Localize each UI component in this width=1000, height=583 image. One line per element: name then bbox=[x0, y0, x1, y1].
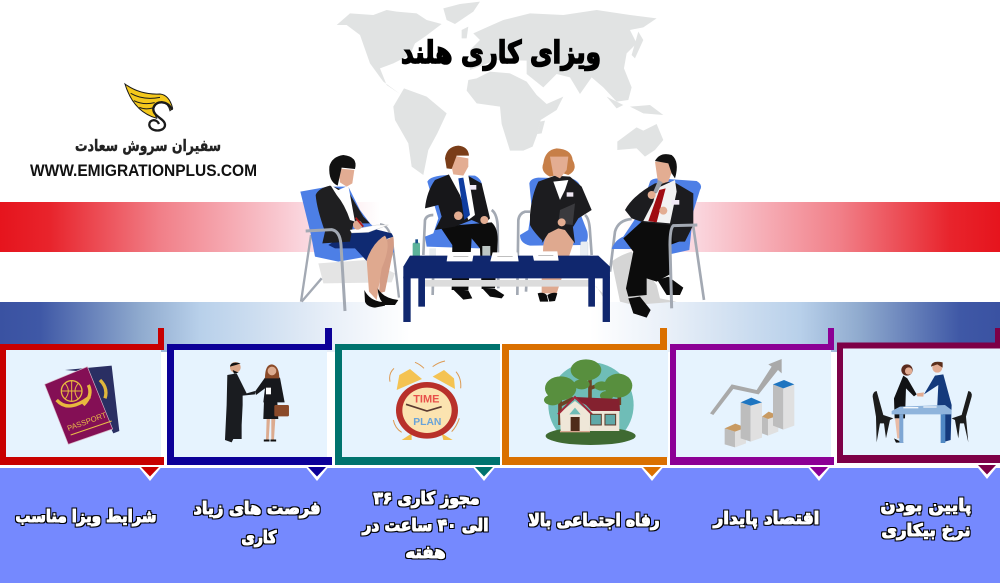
caption: رفاه اجتماعی بالا bbox=[528, 511, 660, 531]
icon: business handshake bbox=[225, 362, 289, 442]
panel discussion illustration bbox=[300, 146, 704, 322]
panel 5: stable economy bbox=[670, 328, 834, 529]
caption: الی ۴۰ ساعت در bbox=[362, 516, 488, 536]
caption: شرایط ویزا مناسب bbox=[16, 507, 156, 527]
icon: business meeting bbox=[873, 362, 972, 443]
caption: کاری bbox=[242, 528, 277, 548]
woman left bbox=[300, 155, 399, 311]
man center left bbox=[423, 146, 504, 300]
panel 6: low unemployment bbox=[837, 328, 1000, 541]
icon: passports: PASSPORT bbox=[66, 410, 108, 433]
icon: alarm clock: TIME bbox=[413, 393, 439, 405]
caption: اقتصاد پایدار bbox=[713, 509, 820, 529]
caption: هفته bbox=[406, 543, 446, 563]
icon: alarm clock bbox=[390, 361, 461, 440]
bottom blue panel bbox=[0, 468, 1000, 583]
caption bbox=[880, 496, 972, 541]
blue band bbox=[0, 302, 1000, 352]
caption: پایین بودن bbox=[880, 496, 972, 516]
panel 2: job opportunities bbox=[167, 328, 332, 548]
left two figures bbox=[300, 146, 504, 311]
caption: مجوز کاری ۳۶ bbox=[374, 489, 480, 509]
right two figures bbox=[517, 148, 704, 318]
panel 1: visa conditions bbox=[0, 328, 164, 527]
caption: نرخ بیکاری bbox=[882, 521, 970, 541]
icon: passports bbox=[45, 366, 119, 444]
world map bbox=[337, 2, 663, 175]
caption bbox=[362, 489, 488, 563]
caption: فرصت های زیاد bbox=[194, 499, 320, 519]
caption bbox=[194, 499, 320, 548]
title: ویزای کاری هلند bbox=[401, 35, 601, 71]
icon: growth chart bbox=[710, 359, 794, 447]
panel 3: work permit hours bbox=[335, 344, 500, 563]
table with bottles and name cards bbox=[403, 239, 610, 322]
logo: swan mark bbox=[125, 84, 173, 130]
logo: website: WWW.EMIGRATIONPLUS.COM bbox=[30, 162, 257, 180]
icon: house and trees bbox=[543, 359, 640, 455]
logo: persian company name: سفیران سروش سعادت bbox=[75, 136, 221, 155]
icon: alarm clock: PLAN bbox=[413, 417, 441, 428]
man right bbox=[610, 154, 704, 318]
panel 4: social welfare bbox=[502, 328, 668, 531]
woman center right bbox=[517, 148, 592, 302]
red band bbox=[0, 202, 1000, 252]
